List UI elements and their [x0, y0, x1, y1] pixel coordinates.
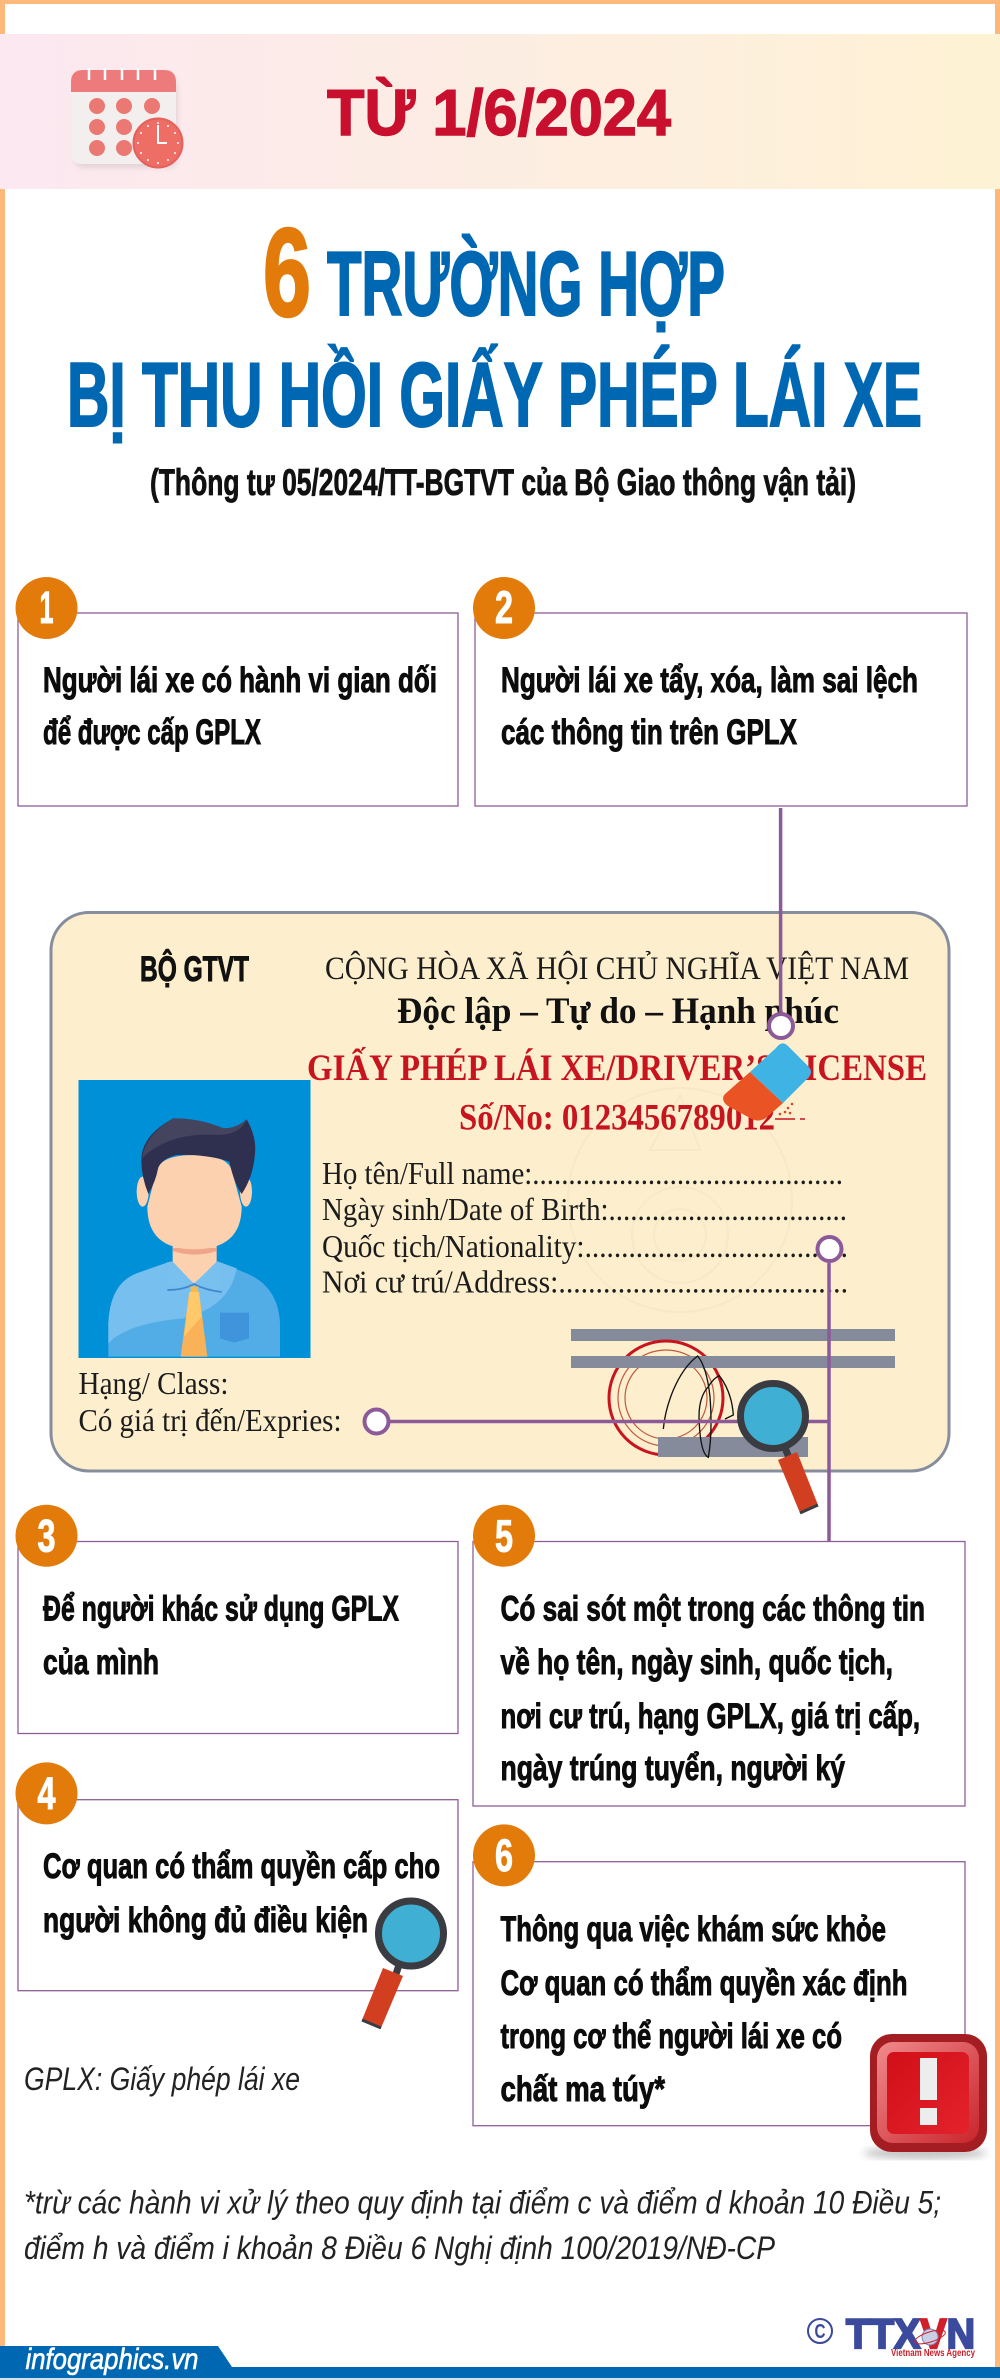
footnote: [24, 2184, 941, 2266]
panel: case 3: [16, 1505, 458, 1734]
personal info fields: Quốc tịch/Nationality:....................................: [322, 1228, 848, 1264]
class and expiry fields: Hạng/ Class:: [78, 1365, 228, 1401]
panel: case 4: Cơ quan có thẩm quyền cấp cho: [43, 1847, 440, 1886]
national heading: [325, 949, 909, 1032]
panel: case 6: [473, 1824, 965, 2126]
panel: case 3: Để người khác sử dụng GPLX: [43, 1590, 399, 1628]
connector lines: [389, 808, 829, 1541]
connector dots: [364, 1014, 842, 1434]
icon: eraser: [723, 1043, 811, 1120]
abbreviation note: GPLX: Giấy phép lái xe: [24, 2061, 300, 2097]
personal info fields: [322, 1155, 848, 1300]
logo: TTXVN: TTXVN: [846, 2310, 975, 2357]
date heading: TỪ 1/6/2024: [327, 76, 671, 149]
agency label: BỘ GTVT: [140, 949, 249, 989]
footer site name: infographics.vn: [26, 2343, 198, 2376]
panel: case 6: 6: [495, 1830, 513, 1881]
panel: case 4: người không đủ điều kiện: [43, 1901, 368, 1940]
personal info fields: Ngày sinh/Date of Birth:.................................: [322, 1191, 847, 1227]
national heading: Độc lập – Tự do – Hạnh phúc: [397, 991, 839, 1032]
icon: warning sign: [863, 2034, 987, 2159]
logo: TTXVN: Vietnam News Agency: [891, 2347, 975, 2359]
header band: [0, 34, 1000, 189]
logo: TTXVN: C: [814, 2321, 826, 2343]
personal info fields: Họ tên/Full name:...........................................: [322, 1155, 843, 1191]
panel: case 1: Người lái xe có hành vi gian dối: [43, 661, 437, 700]
panel: case 5: ngày trúng tuyển, người ký: [500, 1749, 845, 1788]
license title: [307, 1046, 927, 1138]
icon: calendar with clock: [71, 68, 182, 168]
panel: case 6: trong cơ thể người lái xe có: [500, 2017, 842, 2056]
license title: GIẤY PHÉP LÁI XE/DRIVER’S LICENSE: [307, 1046, 927, 1089]
portrait photo: [78, 1080, 310, 1358]
panel: case 3: 3: [38, 1510, 56, 1562]
footer band: [0, 2343, 1000, 2380]
panel: driver's license card: [51, 912, 949, 1471]
panel: case 1: [16, 577, 458, 806]
title: 6: [263, 204, 311, 343]
title: TRƯỜNG HỢP: [327, 234, 725, 335]
panel: case 4: [16, 1762, 458, 1991]
class and expiry fields: Có giá trị đến/Expries:: [78, 1402, 342, 1438]
panel: case 2: [473, 577, 967, 806]
icon: magnifier on case 4: [362, 1901, 444, 2028]
panel: case 5: [473, 1505, 965, 1806]
panel: case 2: 2: [495, 582, 513, 633]
panel: case 1: 1: [40, 582, 54, 633]
panel: case 1: để được cấp GPLX: [43, 713, 261, 752]
panel: case 6: chất ma túy*: [500, 2070, 665, 2109]
footnote: điểm h và điểm i khoản 8 Điều 6 Nghị định 100/2019/NĐ-CP: [24, 2230, 776, 2266]
license title: Số/No: 0123456789012: [459, 1098, 775, 1138]
title: [67, 204, 922, 446]
signature bars and seal: [571, 1329, 895, 1457]
panel: case 2: các thông tin trên GPLX: [501, 713, 797, 752]
national heading: CỘNG HÒA XÃ HỘI CHỦ NGHĨA VIỆT NAM: [325, 949, 909, 987]
personal info fields: Nơi cư trú/Address:.......................................: [322, 1264, 848, 1300]
panel: case 4: 4: [38, 1768, 56, 1819]
icon: magnifier on card: [740, 1384, 818, 1513]
class and expiry fields: [78, 1365, 342, 1438]
panel: case 5: 5: [495, 1510, 513, 1562]
panel: case 3: của mình: [43, 1643, 159, 1682]
